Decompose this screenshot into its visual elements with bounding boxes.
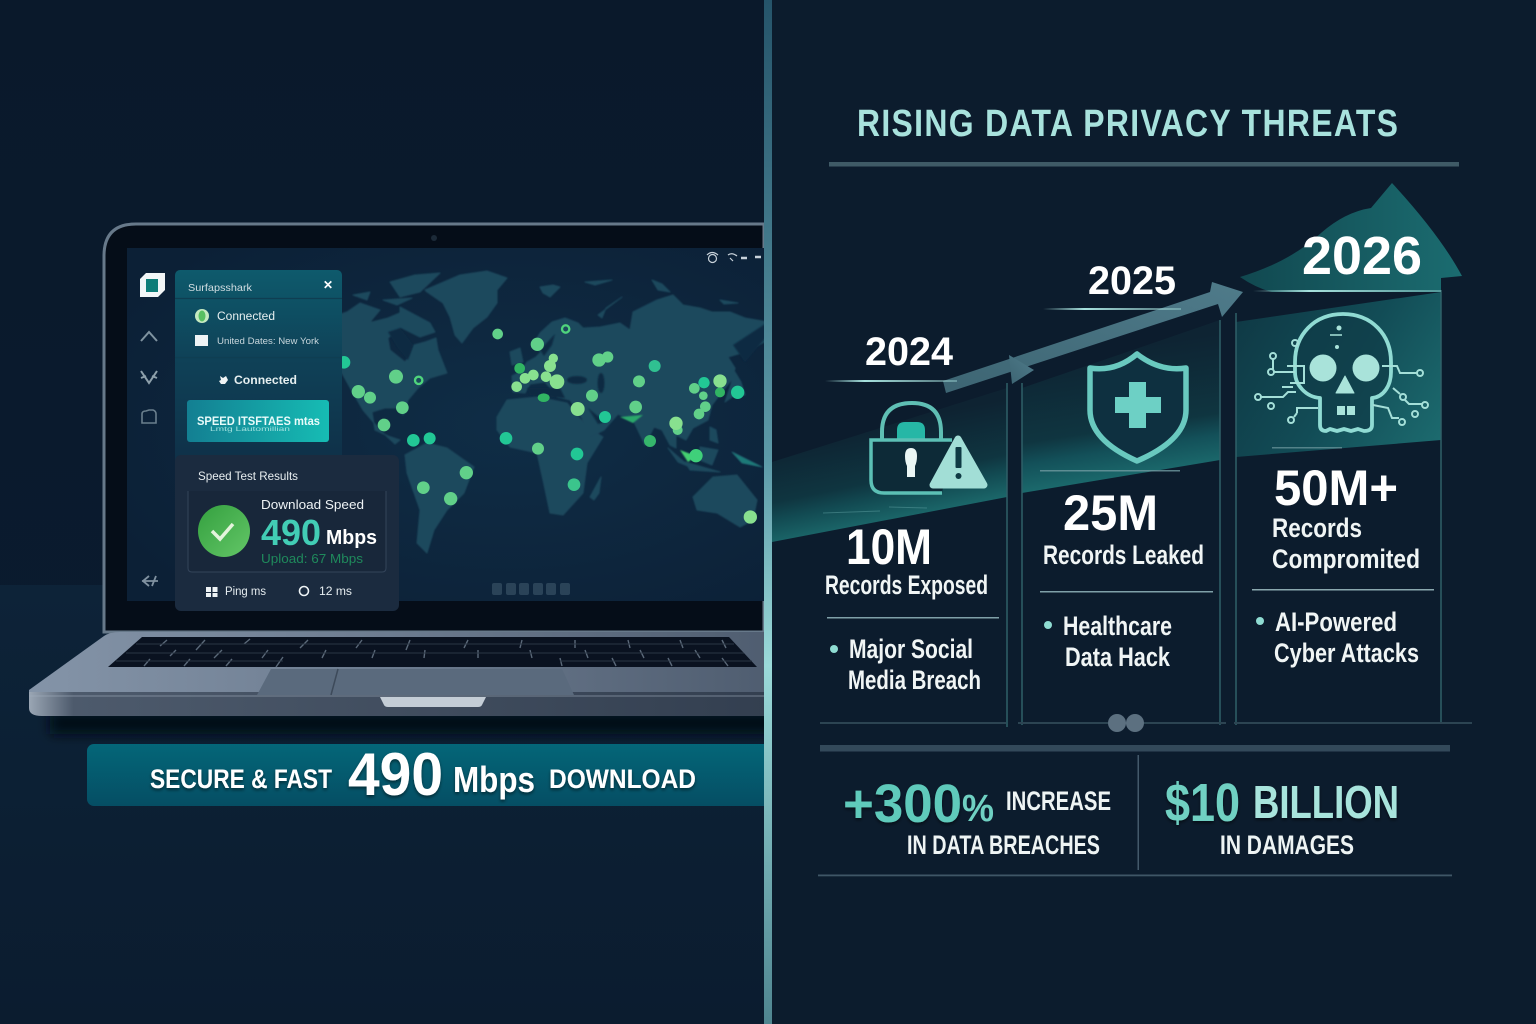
laptop base	[29, 632, 770, 716]
rule	[1272, 447, 1342, 448]
laptop shadow	[50, 712, 810, 734]
column: 2026	[1252, 226, 1441, 668]
icon: chevron	[141, 332, 157, 341]
icon: bottom arrows	[142, 576, 158, 586]
year 2026: 2026	[1302, 226, 1422, 286]
front notch	[380, 697, 486, 707]
detail text: Healthcare	[1063, 611, 1172, 641]
stat: increase	[843, 774, 1111, 860]
laptop	[29, 224, 810, 808]
icon: antlers	[141, 371, 157, 383]
detail text: AI-Powered	[1275, 607, 1397, 637]
stats separator	[1138, 755, 1139, 870]
in data breaches: IN DATA BREACHES	[907, 830, 1100, 860]
pager circles	[1108, 714, 1144, 732]
records compromised	[1272, 513, 1420, 574]
stat 10m: 10M	[846, 519, 932, 575]
stat 50m: 50M+	[1274, 460, 1398, 516]
ping row	[206, 586, 352, 598]
icon: shield plus	[1090, 354, 1186, 461]
year 2024: 2024	[865, 330, 954, 374]
records compromised: Compromited	[1272, 544, 1420, 574]
banner text: 490: 490	[348, 741, 443, 808]
stats bar	[820, 745, 1450, 752]
detail text: Cyber Attacks	[1274, 638, 1419, 668]
results heading: Speed Test Results	[198, 469, 298, 483]
bottom rule	[818, 874, 1452, 876]
detail text: Media Breach	[848, 665, 981, 695]
increase: INCREASE	[1006, 786, 1111, 816]
results inner box	[188, 491, 386, 572]
title: RISING DATA PRIVACY THREATS	[857, 102, 1398, 145]
server dots	[338, 325, 757, 524]
icon: check	[198, 505, 250, 557]
percent: %	[962, 788, 994, 830]
detail text: Major Social	[849, 634, 973, 664]
sidebar icons	[140, 273, 165, 586]
billion: BILLION	[1253, 776, 1399, 828]
icon: lock warning	[871, 403, 984, 493]
big arrow	[1240, 183, 1462, 292]
baseline rules	[820, 722, 1472, 724]
rule	[1040, 591, 1213, 592]
year line	[1043, 308, 1181, 310]
close icon: ✕	[323, 278, 333, 292]
column: 2024	[823, 330, 999, 695]
records compromised: Records	[1272, 513, 1362, 543]
year 2025: 2025	[1088, 259, 1176, 303]
stat 25m: 25M	[1063, 485, 1158, 541]
490 value: 490	[261, 512, 321, 553]
speed test button: SPEED ITSFTAES mtas	[197, 414, 320, 428]
status connected: Connected	[217, 311, 275, 323]
ping row: 12 ms	[319, 584, 352, 598]
+300: +300	[843, 774, 962, 834]
pager dots	[492, 583, 570, 595]
webcam	[431, 235, 437, 241]
server location: United Dates: New York	[217, 336, 319, 347]
world map	[335, 271, 768, 553]
speed test button	[187, 400, 329, 442]
rule	[1040, 470, 1180, 472]
detail text	[1063, 611, 1172, 672]
banner text: secure and fast: SECURE & FAST	[150, 764, 332, 794]
$10: $10	[1165, 773, 1240, 833]
year line	[825, 380, 957, 382]
speed test button: Lmtg Lautomillian	[210, 427, 290, 433]
icon: connected shield	[195, 309, 209, 323]
rule	[827, 617, 999, 618]
banner	[87, 741, 787, 808]
year line	[1253, 290, 1441, 292]
detail text: Data Hack	[1065, 642, 1171, 672]
detail text	[848, 634, 981, 695]
connected row: Connected	[234, 373, 297, 387]
bullet	[830, 645, 838, 653]
status icons	[707, 252, 761, 262]
popup title: Surfapsshark	[188, 282, 253, 294]
banner text: download: DOWNLOAD	[549, 764, 696, 794]
stat: damages	[1165, 773, 1399, 860]
faint rules under lock	[823, 507, 927, 513]
panel: vpn popup	[175, 270, 342, 470]
column frames	[1007, 290, 1441, 727]
records exposed: Records Exposed	[825, 570, 988, 600]
screen	[127, 248, 764, 601]
icon: app logo	[140, 273, 165, 297]
keyboard	[108, 637, 757, 667]
detail text	[1274, 607, 1419, 668]
download speed label: Download Speed	[261, 497, 364, 512]
bullet	[1256, 617, 1264, 625]
records leaked: Records Leaked	[1043, 540, 1204, 570]
teal growth bands	[772, 292, 1441, 542]
rule	[1252, 589, 1434, 590]
mbps unit: Mbps	[326, 527, 377, 549]
trend arrow	[943, 282, 1243, 393]
laptop lid bezel	[104, 224, 764, 632]
inland seas	[388, 322, 768, 424]
banner text: mbps: Mbps	[453, 759, 535, 800]
trackpad	[257, 669, 574, 695]
column: 2025	[1040, 259, 1213, 672]
ping row: Ping ms	[225, 586, 266, 598]
connected row	[219, 375, 296, 384]
icon: circuit skull	[1255, 314, 1428, 431]
icon: box	[142, 410, 156, 423]
upload: Upload: 67 Mbps	[261, 551, 364, 566]
bullet	[1044, 621, 1052, 629]
land masses	[335, 271, 768, 553]
center divider	[764, 0, 772, 1024]
in damages: IN DAMAGES	[1220, 830, 1354, 860]
title underline	[829, 162, 1459, 166]
panel: speed test results	[175, 455, 399, 611]
coastal highlights	[620, 415, 762, 467]
icon: flag	[195, 335, 208, 346]
